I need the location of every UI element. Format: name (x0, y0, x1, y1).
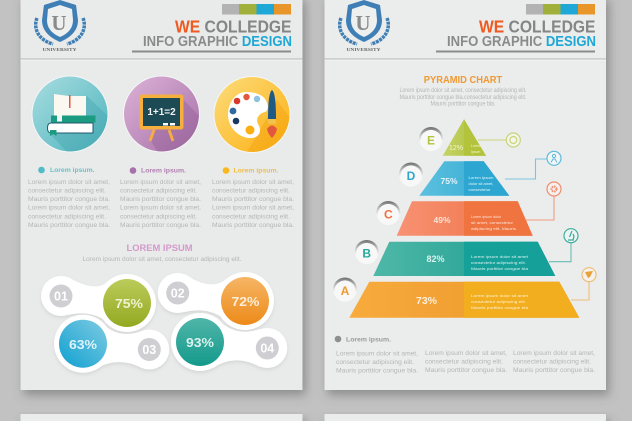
column 1: text: consectetur adipiscing elit. (28, 214, 106, 220)
letter badge B (355, 240, 379, 264)
column 3: text (212, 167, 294, 229)
icon: palette (214, 76, 295, 155)
pyramid tier D: 75% (440, 176, 458, 186)
logo: university shield (36, 0, 84, 52)
bubble 02 (158, 272, 274, 330)
heading: pyramid chart: PYRAMID CHART (424, 74, 503, 86)
column 3: text: Lorem ipsum. (234, 168, 279, 174)
column 2: text: Lorem ipsum. (141, 168, 186, 174)
legend label (335, 336, 391, 344)
icon: target (506, 133, 520, 147)
column 1: text: Lorem ipsum dolor sit amet, (28, 204, 110, 212)
pyramid description: Lorem ipsum dolor sit amet, consectetur adipiscing elit. (400, 87, 527, 94)
letter badge A: A (341, 284, 350, 298)
pyramid tier B: Mauris porttitor congue bla (471, 267, 529, 271)
pyramid tier E (443, 119, 486, 156)
subtitle: info graphic design: INFO GRAPHIC DESIGN (447, 34, 596, 50)
bottom column 1: Lorem ipsum dolor sit amet, (336, 350, 418, 358)
bottom column 2 (425, 350, 507, 374)
letter badge E: E (427, 134, 435, 148)
column 3: text: Mauris porttitor congue bla. (212, 196, 294, 203)
column 2: text (120, 167, 201, 229)
panel: left page (20, 0, 302, 390)
bottom column 2: Mauris porttitor congue bla. (425, 367, 507, 374)
colour bars (222, 4, 291, 14)
bottom column 3 (513, 350, 595, 374)
letter badge E (419, 127, 443, 151)
icon: chalkboard (123, 76, 205, 155)
pyramid tier B: Lorem ipsum dolor sit amet (471, 255, 529, 259)
column 3: text: Mauris porttitor congue bla. (212, 222, 294, 229)
column 2: text: Lorem ipsum dolor sit amet, (120, 179, 201, 186)
pyramid tier B (373, 242, 555, 276)
column 3: text: consectetur adipiscing elit. (212, 214, 290, 220)
pyramid tier A: consectetur adipiscing elit. (471, 300, 526, 304)
bottom column 1 (336, 350, 418, 374)
bottom column 3: Lorem ipsum dolor sit amet, (513, 350, 595, 357)
column 2: text: consectetur adipiscing elit. (120, 188, 197, 194)
pyramid description: Mauris porttitor congue bla. (430, 100, 496, 108)
bottom column 1: Mauris porttitor congue bla. (336, 368, 418, 374)
header rule (132, 50, 291, 52)
letter badge B: B (362, 246, 371, 260)
subheading: Lorem ipsum dolor sit amet, consectetur adipiscing elit. (82, 256, 242, 263)
logo: university shield: UNIVERSITY (346, 47, 381, 52)
column 1: text: Mauris porttitor congue bla. (28, 222, 110, 229)
letter badge D (399, 162, 423, 187)
lower page stubs (20, 414, 606, 421)
icon: person (547, 151, 561, 165)
panel: right page (324, 0, 606, 390)
pyramid tier C: Lorem ipsum dolor (471, 215, 502, 219)
column 1: text: consectetur adipiscing elit. (28, 188, 106, 194)
pyramid tier D: consectetur (468, 188, 491, 192)
pyramid tier B: consectetur adipiscing elit. (471, 261, 526, 265)
icon: books (32, 76, 112, 155)
column 3: text: Lorem ipsum dolor sit amet, (212, 204, 294, 212)
icon: microscope (564, 229, 578, 243)
pyramid tier D: dolor sit amet, (468, 182, 494, 186)
icon: chalkboard: 1+1=2 (147, 107, 176, 118)
bubble 03: 03 (142, 343, 156, 357)
bottom column 3: consectetur adipiscing elit. (513, 358, 591, 366)
bubble 03: 63% (69, 337, 97, 352)
column 3: text: Lorem ipsum dolor sit amet, (212, 179, 294, 186)
logo: university shield (340, 0, 388, 52)
bubble 04: 93% (186, 335, 214, 350)
column 3: text: consectetur adipiscing elit. (212, 188, 290, 194)
pyramid tier E: 12% (449, 145, 463, 152)
bubble 01 (41, 274, 156, 332)
title: we colledge: WE COLLEDGE (479, 16, 596, 36)
column 2: text: consectetur adipiscing elit. (120, 214, 197, 220)
letter badge C (376, 201, 400, 225)
logo: university shield: U (355, 11, 371, 35)
pyramid tier E: Lorem (471, 144, 481, 148)
title: we colledge: WE COLLEDGE (175, 16, 292, 36)
legend label: Lorem ipsum. (346, 336, 391, 344)
pyramid tier C: 49% (433, 215, 451, 225)
connector lines (478, 140, 589, 300)
pyramid description: Mauris porttitor congue bla.consectetur adipiscing elit. (400, 94, 527, 101)
column 1: text (28, 167, 110, 229)
pyramid tier A: 73% (416, 295, 438, 307)
pyramid tier B: 82% (426, 254, 445, 264)
pyramid tier A (349, 282, 579, 318)
pyramid tier C (397, 201, 533, 236)
bottom column 2: consectetur adipiscing elit. (425, 358, 503, 366)
column 1: text: Mauris porttitor congue bla. (28, 196, 110, 203)
pyramid tier A: Lorem ipsum dolor sit amet (471, 294, 529, 298)
bubble 02: 72% (232, 294, 260, 309)
column 2: text: Mauris porttitor congue bla. (120, 222, 201, 229)
pyramid description (400, 87, 527, 108)
pyramid tier C: adipiscing elit. Mauris (471, 227, 516, 231)
letter badge D: D (407, 169, 416, 183)
bubble 04: 04 (260, 342, 274, 356)
pyramid tier A: Mauris porttitor congue bla (471, 306, 529, 310)
colour bars (526, 4, 595, 14)
subtitle: info graphic design: INFO GRAPHIC DESIGN (143, 34, 292, 50)
bubble 03 (54, 315, 169, 373)
bubble 01: 75% (115, 296, 143, 311)
column 1: text: Lorem ipsum dolor sit amet, (28, 179, 110, 186)
bubble 01: 01 (54, 290, 68, 304)
heading: lorem ipsum: LOREM IPSUM (126, 243, 193, 254)
column 1: text: Lorem ipsum. (50, 167, 95, 174)
bottom column 3: Mauris porttitor congue bla. (513, 367, 595, 374)
header rule (436, 50, 595, 52)
icon: gear (547, 182, 561, 196)
logo: university shield: U (51, 11, 67, 35)
bottom column 1: consectetur adipiscing elit. (336, 359, 414, 366)
letter badge C: C (384, 208, 393, 222)
letter badge A (333, 278, 357, 302)
pyramid tier E: ipsum (471, 150, 480, 154)
bubble 04 (171, 313, 287, 371)
pyramid tier D: Lorem ipsum (468, 176, 494, 180)
logo: university shield: UNIVERSITY (42, 47, 77, 52)
bottom column 2: Lorem ipsum dolor sit amet, (425, 350, 507, 357)
icon: megaphone (582, 268, 596, 282)
column 2: text: Lorem ipsum dolor sit amet, (120, 204, 201, 212)
column 2: text: Mauris porttitor congue bla. (120, 196, 201, 203)
pyramid tier D (419, 161, 509, 196)
pyramid tier C: sit amet, consectetur (471, 221, 514, 225)
bubble 02: 02 (171, 286, 185, 300)
